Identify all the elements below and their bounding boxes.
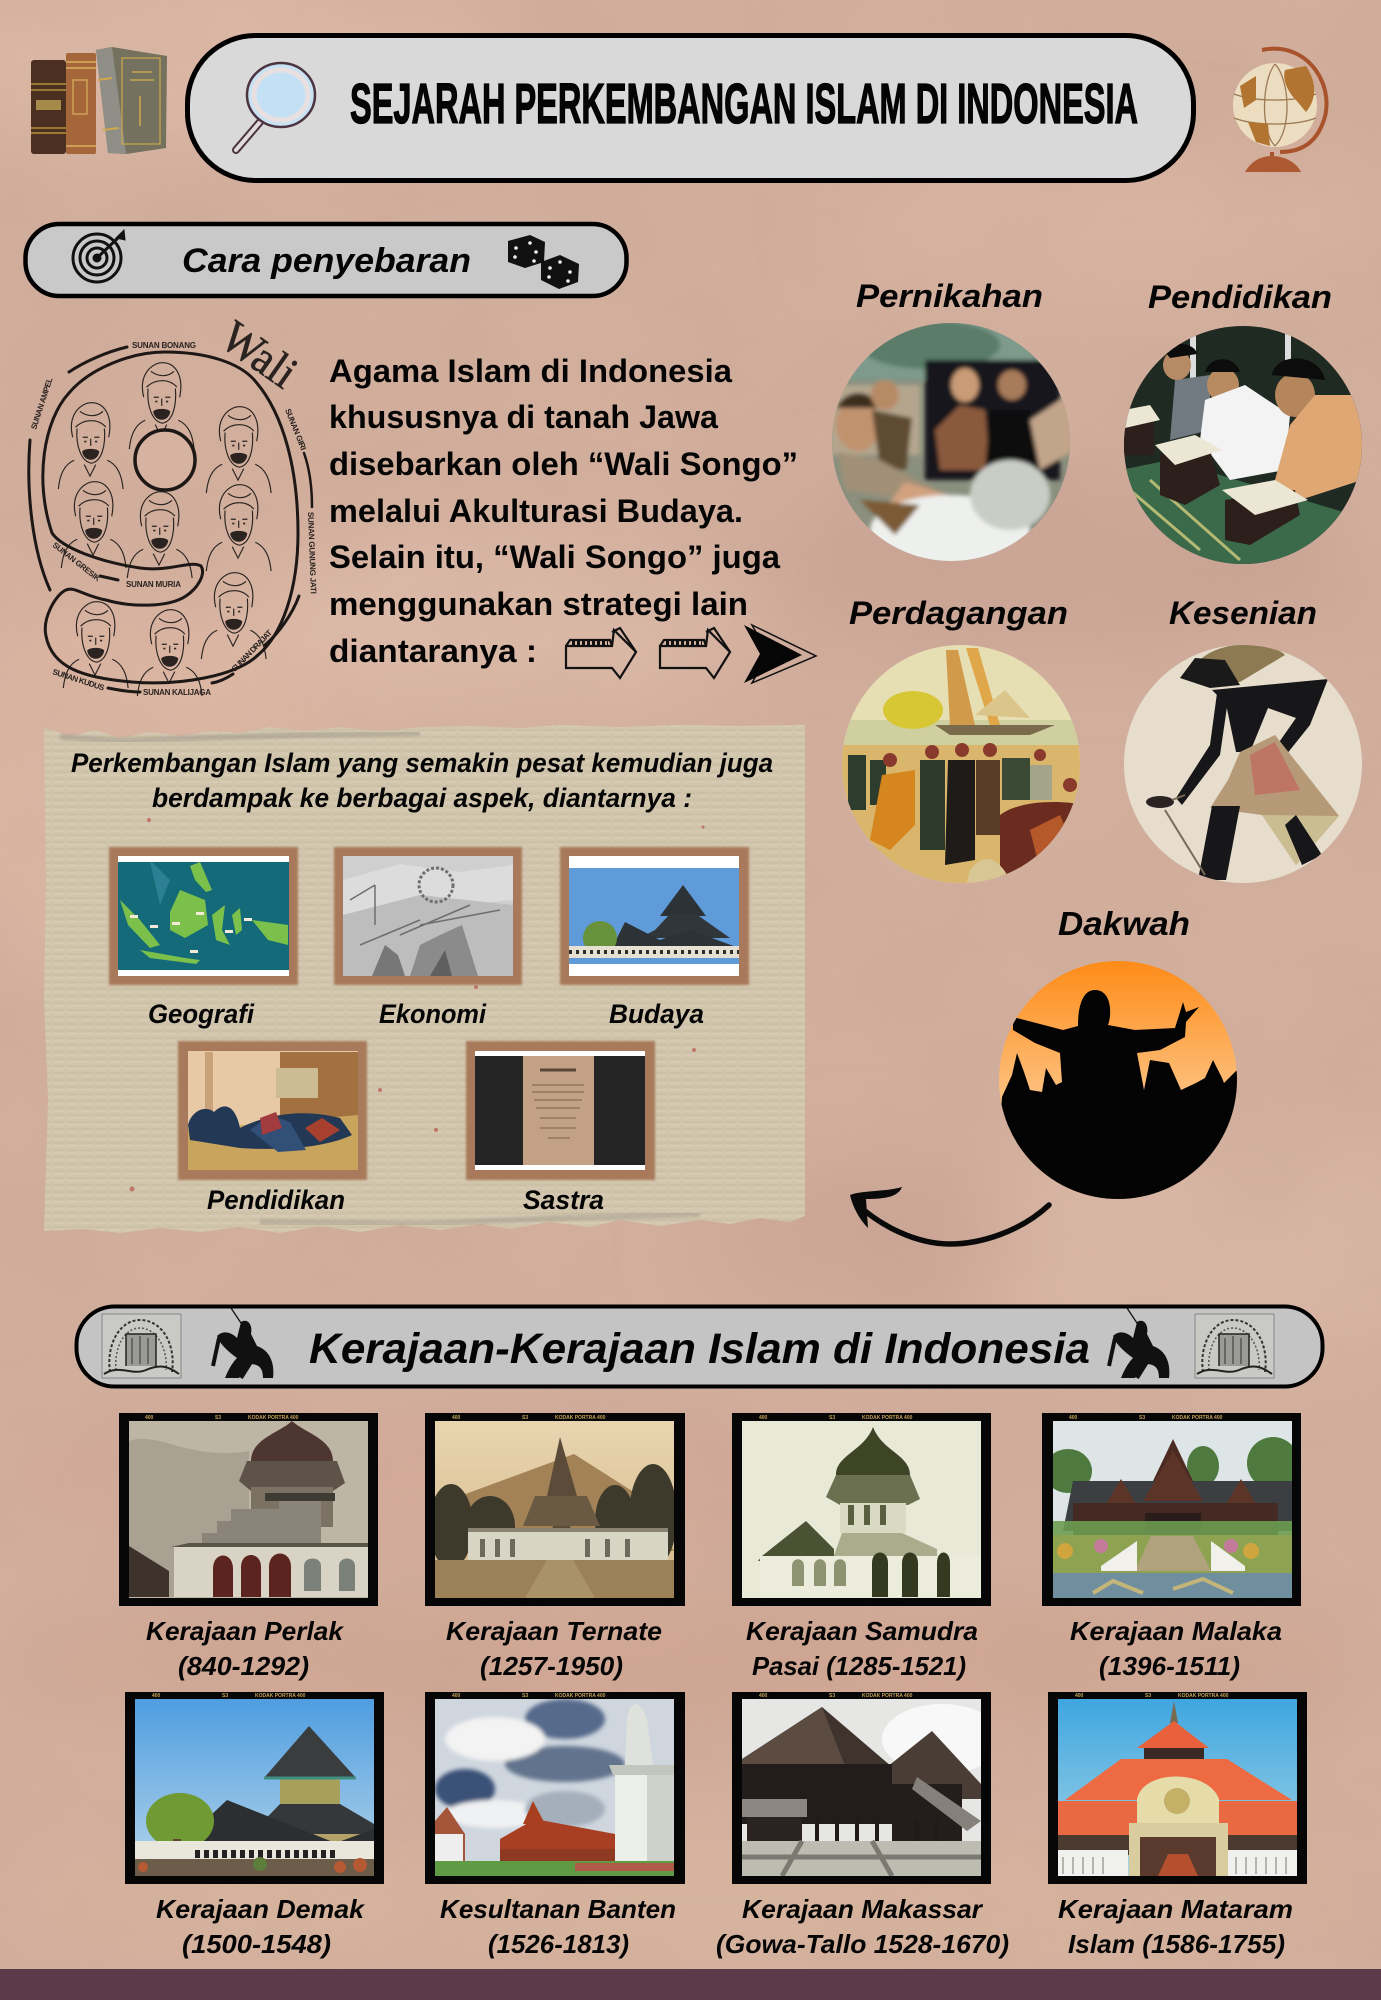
caption: Kesultanan Banten: Kesultanan Banten xyxy=(440,1894,676,1924)
caption: Kerajaan Makassar: (Gowa-Tallo 1528-1670) xyxy=(716,1929,1009,1959)
photo: Banten mosque and minaret xyxy=(435,1699,675,1876)
caption: Kerajaan Samudra Pasai: Kerajaan Samudra xyxy=(746,1616,978,1646)
label: Dakwah: Dakwah xyxy=(1058,905,1190,942)
photo: Mataram mosque xyxy=(1058,1699,1297,1876)
section heading: Cara penyebaran xyxy=(26,224,626,296)
panel: torn paper with impacts xyxy=(44,725,805,1233)
strategy: Kesenian xyxy=(1120,595,1370,890)
names xyxy=(29,341,318,697)
icon: dice xyxy=(508,235,579,289)
photo: preacher silhouette xyxy=(995,960,1240,1205)
text block: Wali Songo intro: Agama Islam di Indonesia xyxy=(329,353,732,389)
illustration: Wali Songo xyxy=(29,310,318,697)
caption: Kerajaan Perlak: (840-1292) xyxy=(178,1651,309,1681)
caption: Kerajaan Perlak xyxy=(146,1616,345,1681)
card: Kerajaan Makassar: S3 xyxy=(829,1693,835,1699)
card: Kerajaan Demak: 400 xyxy=(152,1693,161,1699)
card: Kesultanan Banten: 400 xyxy=(452,1693,461,1699)
card: Kerajaan Malaka: KODAK PORTRA 400 xyxy=(1172,1415,1223,1421)
icon: magnifying glass xyxy=(236,63,315,150)
caption: Kerajaan Malaka: Kerajaan Malaka xyxy=(1070,1616,1282,1646)
photo: Perlak mosque xyxy=(129,1421,368,1598)
names: SUNAN KUDUS xyxy=(51,667,106,693)
card: Kerajaan Perlak: 400 xyxy=(145,1415,154,1421)
card: Kerajaan Samudra Pasai: S3 xyxy=(829,1415,835,1421)
arrow: sketch 2 xyxy=(660,628,730,678)
card: Kerajaan Mataram Islam: KODAK PORTRA 400 xyxy=(1178,1693,1229,1699)
text block: Wali Songo intro: disebarkan oleh “Wali Songo” xyxy=(329,446,798,482)
strategy: Pendidikan xyxy=(1120,279,1370,570)
card: Kerajaan Samudra Pasai xyxy=(732,1413,991,1606)
card: Kerajaan Malaka: S3 xyxy=(1139,1415,1145,1421)
card: Kerajaan Malaka: 400 xyxy=(1069,1415,1078,1421)
card: Kesultanan Banten: S3 xyxy=(522,1693,528,1699)
label: Pendidikan: Pendidikan xyxy=(207,1185,345,1215)
card: Kerajaan Mataram Islam: S3 xyxy=(1145,1693,1151,1699)
card: Kerajaan Makassar: 400 xyxy=(759,1693,768,1699)
caption: Kerajaan Makassar xyxy=(716,1894,1009,1959)
label: Kesenian: Kesenian xyxy=(1169,595,1317,631)
card: Kerajaan Mataram Islam: 400 xyxy=(1075,1693,1084,1699)
text block: Wali Songo intro: diantaranya : xyxy=(329,633,537,669)
names: SUNAN GIRI xyxy=(283,407,308,452)
card: Kerajaan Samudra Pasai: 400 xyxy=(759,1415,768,1421)
caption: Kerajaan Perlak: Kerajaan Perlak xyxy=(146,1616,345,1646)
photo: Malaka palace xyxy=(1044,1421,1299,1598)
card: Kerajaan Samudra Pasai: KODAK PORTRA 400 xyxy=(862,1415,913,1421)
label: Geografi: Geografi xyxy=(148,999,254,1029)
title banner xyxy=(188,36,1194,180)
caption: Kerajaan Demak: Kerajaan Demak xyxy=(156,1894,366,1924)
caption: Kerajaan Malaka: (1396-1511) xyxy=(1099,1651,1240,1681)
framed image: Ekonomi sketch xyxy=(334,847,522,985)
icon: etching right xyxy=(1195,1314,1274,1378)
label: Budaya: Budaya xyxy=(609,999,704,1029)
strategy: Pernikahan xyxy=(830,278,1075,565)
names: SUNAN KALIJAGA xyxy=(143,688,211,697)
card: Kerajaan Mataram Islam xyxy=(1048,1692,1307,1884)
label: Perdagangan: Perdagangan xyxy=(849,595,1068,631)
photo: Samudra Pasai mosque xyxy=(742,1421,981,1598)
icon: etching left xyxy=(102,1314,181,1378)
caption: Kerajaan Samudra Pasai: Pasai (1285-1521) xyxy=(752,1651,966,1681)
card: Kerajaan Malaka xyxy=(1042,1413,1301,1606)
card: Kerajaan Demak xyxy=(125,1692,384,1884)
text block: Wali Songo intro: menggunakan strategi lain xyxy=(329,586,748,622)
ring outline xyxy=(29,347,312,692)
footer band xyxy=(0,1969,1381,2000)
names: SUNAN BONANG xyxy=(132,341,196,350)
caption: Kerajaan Ternate: (1257-1950) xyxy=(480,1651,623,1681)
caption: Kerajaan Malaka xyxy=(1070,1616,1282,1681)
caption: Kerajaan Makassar: Kerajaan Makassar xyxy=(742,1894,984,1924)
icon: knight right xyxy=(1109,1308,1169,1378)
icon: target xyxy=(73,230,125,282)
icon: knight left xyxy=(213,1308,273,1378)
panel heading: Perkembangan Islam yang semakin pesat kemudian juga xyxy=(71,748,773,778)
card: Kerajaan Demak: KODAK PORTRA 400 xyxy=(255,1693,306,1699)
label: Ekonomi: Ekonomi xyxy=(379,999,486,1029)
arrow: curved to panel xyxy=(850,1187,1049,1244)
text block: Wali Songo intro: melalui Akulturasi Budaya. xyxy=(329,493,743,529)
arrow: sketch 1 xyxy=(566,628,636,678)
card: Kerajaan Ternate xyxy=(425,1413,685,1606)
card: Kerajaan Ternate: KODAK PORTRA 400 xyxy=(555,1415,606,1421)
icon: globe xyxy=(1233,49,1327,172)
framed image: Budaya mosque xyxy=(560,847,749,985)
caption: Kerajaan Demak xyxy=(156,1894,366,1959)
card: Kerajaan Perlak: KODAK PORTRA 400 xyxy=(248,1415,299,1421)
card: Kerajaan Ternate: 400 xyxy=(452,1415,461,1421)
text: Cara penyebaran: Cara penyebaran xyxy=(182,242,471,280)
card: Kerajaan Perlak: S3 xyxy=(215,1415,221,1421)
framed image: Pendidikan painting xyxy=(178,1041,367,1180)
names: SUNAN MURIA xyxy=(126,580,181,589)
panel heading: berdampak ke berbagai aspek, diantarnya : xyxy=(152,783,692,813)
caption: Kerajaan Ternate: Kerajaan Ternate xyxy=(446,1616,662,1646)
card: Kesultanan Banten: KODAK PORTRA 400 xyxy=(555,1693,606,1699)
caption: Kerajaan Ternate xyxy=(446,1616,662,1681)
names: SUNAN DRAJAT xyxy=(230,628,274,673)
caption: Kerajaan Mataram Islam: Islam (1586-1755) xyxy=(1068,1929,1285,1959)
photo: Demak mosque xyxy=(135,1699,374,1876)
label: Sastra: Sastra xyxy=(523,1185,604,1215)
figures xyxy=(58,363,271,696)
heading text: Kerajaan-Kerajaan Islam di Indonesia xyxy=(309,1325,1090,1373)
card: Kerajaan Makassar: KODAK PORTRA 400 xyxy=(862,1693,913,1699)
strategy: Perdagangan xyxy=(840,595,1085,890)
photo: wedding xyxy=(830,320,1075,565)
text block: Wali Songo intro xyxy=(329,353,798,669)
caption: Kerajaan Demak: (1500-1548) xyxy=(182,1929,331,1959)
names: SUNAN GUNUNG JATI xyxy=(306,512,318,594)
text block: Wali Songo intro: khususnya di tanah Jawa xyxy=(329,399,718,435)
names: SUNAN AMPEL xyxy=(29,376,55,431)
card: Kerajaan Makassar xyxy=(732,1692,1002,1884)
caption: Kerajaan Mataram Islam xyxy=(1058,1894,1293,1959)
panel heading xyxy=(71,748,773,813)
caption: Kesultanan Banten: (1526-1813) xyxy=(488,1929,629,1959)
strategy: Dakwah xyxy=(995,905,1240,1205)
photo: wayang xyxy=(1120,640,1370,890)
arrow: black chevron xyxy=(744,625,816,683)
photo: Ternate mosque xyxy=(429,1421,677,1598)
card: Kesultanan Banten xyxy=(425,1692,685,1884)
caption: Kerajaan Mataram Islam: Kerajaan Mataram xyxy=(1058,1894,1293,1924)
label: Pernikahan: Pernikahan xyxy=(856,278,1043,314)
icon: books xyxy=(31,47,167,154)
framed image: Geografi map xyxy=(109,847,298,985)
photo: Quran study xyxy=(1120,320,1370,570)
framed image: Sastra manuscript xyxy=(466,1041,655,1180)
label: Pendidikan: Pendidikan xyxy=(1148,279,1332,315)
card: Kerajaan Demak: S3 xyxy=(222,1693,228,1699)
names: SUNAN GRESIK xyxy=(51,540,102,583)
photo: Makassar house xyxy=(742,1699,1002,1876)
card: Kerajaan Ternate: S3 xyxy=(522,1415,528,1421)
card: Kerajaan Perlak xyxy=(119,1413,378,1606)
caption: Kerajaan Samudra Pasai xyxy=(746,1616,978,1681)
section heading: Kerajaan xyxy=(76,1306,1322,1386)
text block: Wali Songo intro: Selain itu, “Wali Songo” juga xyxy=(329,539,780,575)
word: Wali: Wali xyxy=(212,310,307,398)
caption: Kesultanan Banten xyxy=(440,1894,676,1959)
photo: trade painting xyxy=(840,640,1085,890)
